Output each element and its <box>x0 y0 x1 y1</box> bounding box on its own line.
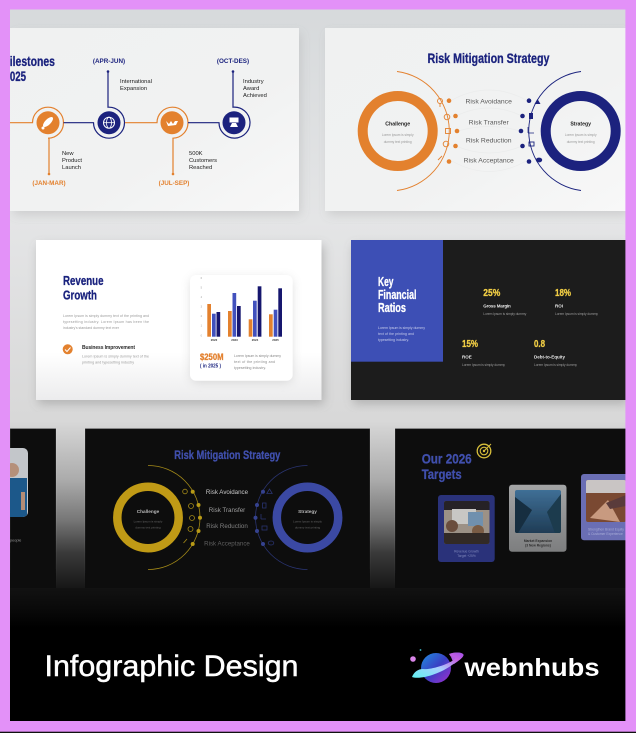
heading: key financial ratios: Financial <box>378 287 416 302</box>
strategy ring <box>546 96 616 166</box>
stat: roe: Lorem Ipsum is simply dummy <box>462 363 505 367</box>
stat: gross margin: 25% <box>483 288 500 299</box>
yellow icons <box>183 489 194 543</box>
navy icons <box>528 99 542 162</box>
footer title: Infographic Design <box>44 650 298 683</box>
timeline labels: Customers <box>189 158 217 164</box>
bar chart: 2023 <box>231 338 238 342</box>
card: market expansion <box>509 485 566 552</box>
icon: customers <box>160 111 184 134</box>
risk labels: Risk Avoidance <box>206 489 249 496</box>
stat: gross margin: Lorem Ipsum is simply dummy <box>483 312 527 316</box>
stat: roe: ROE <box>462 354 472 360</box>
chart card <box>191 278 292 382</box>
bottom edge line <box>0 732 636 733</box>
bar chart: 6 <box>201 277 203 280</box>
heading: risk mitigation strategy: Risk Mitigation Strategy <box>428 50 550 66</box>
stat: roi: 18% <box>555 288 571 299</box>
chart note: text of the printing and <box>234 360 275 364</box>
bar chart: 4 <box>201 296 203 299</box>
timeline labels: Achieved <box>243 93 267 99</box>
challenge text: Challenge <box>385 122 410 128</box>
strategy text: Strategy <box>298 509 317 514</box>
risk labels: Risk Transfer <box>469 120 509 126</box>
heading: revenue growth: Revenue <box>63 273 104 288</box>
timeline labels: New <box>62 151 74 157</box>
heading: key financial ratios: Ratios <box>378 300 406 315</box>
photo: person <box>10 448 28 517</box>
heading: Risk Mitigation Strategy <box>174 448 281 462</box>
business improvement: Lorem Ipsum is simply dummy text of the <box>82 354 149 358</box>
card: market expansion: (3 New Regions) <box>525 544 551 548</box>
stat: debt to equity: Lorem Ipsum is simply dummy <box>534 363 577 367</box>
strategy ring <box>277 487 338 548</box>
strategy text: dummy text printing <box>295 526 320 530</box>
icon: target <box>477 444 491 458</box>
business improvement: printing and typesetting industry <box>82 360 134 364</box>
paragraph: typesetting industry. <box>378 338 409 342</box>
business improvement: Business Improvement <box>82 345 135 351</box>
chart note: Lorem Ipsum is simply dummy <box>234 354 281 358</box>
card: revenue growth <box>438 495 495 562</box>
risk labels: Risk Acceptance <box>464 158 514 164</box>
paragraph <box>63 314 149 330</box>
paragraph <box>378 326 425 342</box>
risk labels: Risk Acceptance <box>204 540 250 548</box>
stat: roi <box>555 288 598 316</box>
bar chart: 3 <box>201 306 203 308</box>
timeline labels: Expansion <box>120 86 147 92</box>
strategy text <box>565 122 597 144</box>
icon: award <box>222 111 246 134</box>
heading: our 2026 targets: Our 2026 <box>422 450 472 466</box>
logo: webnhubs: webnhubs <box>463 654 600 682</box>
timeline labels <box>62 79 267 171</box>
bar chart: 0 <box>201 334 203 338</box>
stat: debt to equity <box>534 339 577 367</box>
timeline labels: Reached <box>189 165 212 171</box>
navy arc with dots <box>519 72 581 190</box>
strategy text <box>293 509 322 530</box>
strategy text: Lorem Ipsum is simply <box>565 133 597 137</box>
quarter labels: (APR-JUN) <box>93 58 125 65</box>
icon: rocket <box>36 111 60 134</box>
risk labels: Risk Avoidance <box>466 98 512 106</box>
faint connecting arcs <box>452 90 526 172</box>
stat: $250M <box>200 352 224 370</box>
challenge text: dummy text printing <box>135 526 161 530</box>
card: strengthen brand: Strengthen Brand Equity <box>588 528 624 532</box>
caption: people <box>10 538 21 542</box>
heading: revenue growth <box>63 273 104 302</box>
heading: milestones: Milestones <box>1 53 55 69</box>
card: revenue growth: Target +25% <box>457 554 476 558</box>
stat: $250M: ( in 2025 ) <box>200 364 221 370</box>
risk labels: Risk Reduction <box>466 138 512 144</box>
stat: roi: Lorem Ipsum is simply dummy <box>555 312 598 316</box>
paragraph: typesetting industry. Lorem Ipsum has been the <box>63 320 149 324</box>
photo: team at desk <box>444 501 490 544</box>
card: market expansion: Market Expansion <box>524 539 552 543</box>
chart note <box>234 354 281 370</box>
challenge text: Challenge <box>137 509 160 514</box>
orange arc with dots <box>397 72 459 190</box>
panel: key financial ratios slide <box>351 240 628 404</box>
paragraph: Lorem Ipsum is simply dummy <box>378 326 425 330</box>
bar chart: 2025 <box>272 338 279 342</box>
blue icons <box>261 489 274 545</box>
challenge text: Lorem Ipsum is simply <box>382 133 414 137</box>
panel: milestones timeline slide <box>0 28 301 215</box>
challenge text: Lorem Ipsum is simply <box>134 520 163 524</box>
business improvement <box>82 345 149 364</box>
risk labels: Risk Reduction <box>206 523 248 530</box>
quarter labels: (JUL-SEP) <box>159 180 189 187</box>
quarter labels: (JAN-MAR) <box>32 180 66 187</box>
footer band <box>10 588 626 721</box>
quarter labels <box>32 58 249 187</box>
bar chart: 2 <box>201 315 203 318</box>
bar chart: 5 <box>201 286 203 290</box>
bar chart <box>201 277 282 342</box>
challenge text: dummy text printing <box>384 140 412 144</box>
icon: check <box>63 344 73 354</box>
strategy text: Strategy <box>570 122 591 128</box>
paragraph: industry's standard dummy text ever <box>63 326 120 330</box>
panel: cropped dark slide <box>5 428 56 588</box>
icon: planet <box>410 649 463 683</box>
stat: roe <box>462 339 505 367</box>
timeline labels: Product <box>62 158 82 164</box>
risk labels <box>464 98 514 164</box>
heading: milestones <box>1 53 55 84</box>
challenge text <box>134 509 163 530</box>
stat: $250M: $250M <box>200 352 224 362</box>
bar chart: 1 <box>201 324 203 328</box>
paragraph: Lorem Ipsum is simply dummy text of the printing and <box>63 314 149 318</box>
stat: gross margin: Gross Margin <box>483 304 511 308</box>
blue block <box>351 240 443 362</box>
stat: roi: ROI <box>555 304 563 308</box>
logo: webnhubs <box>410 649 600 683</box>
timeline labels: Industry <box>243 79 264 85</box>
bar chart: 2024 <box>252 338 259 342</box>
panel: risk mitigation strategy light slide <box>325 28 628 215</box>
icon: globe <box>98 111 120 134</box>
heading: revenue growth: Growth <box>63 288 97 302</box>
photo: office towers <box>515 490 561 533</box>
card: strengthen brand: & Customer Experience <box>588 532 623 536</box>
stat: roe: 15% <box>462 339 478 350</box>
timeline labels: 500K <box>189 151 203 157</box>
challenge ring <box>117 487 179 548</box>
strategy text: Lorem Ipsum is simply <box>293 520 322 524</box>
photo: hands together <box>586 480 626 522</box>
card: strengthen brand <box>581 474 626 540</box>
blue arc with dots <box>254 466 308 570</box>
panel: risk mitigation dark slide <box>85 428 370 588</box>
heading: key financial ratios <box>378 274 416 315</box>
quarter labels: (OCT-DES) <box>217 58 249 65</box>
stat: debt to equity: Debt-to-Equity <box>534 354 565 360</box>
paragraph: text of the printing and <box>378 332 414 336</box>
timeline labels: Launch <box>62 165 81 171</box>
orange icons <box>438 98 450 160</box>
bar chart: 2022 <box>211 338 218 342</box>
risk labels <box>204 489 250 548</box>
challenge text <box>382 122 414 144</box>
strategy text: dummy text printing <box>567 140 595 144</box>
stat: gross margin <box>483 288 527 316</box>
heading: our 2026 targets: Targets <box>422 466 462 482</box>
risk labels: Risk Transfer <box>209 507 245 514</box>
chart note: typesetting industry. <box>234 366 266 370</box>
yellow arc with dots <box>148 466 202 570</box>
timeline connectors <box>0 72 250 174</box>
card: revenue growth: Revenue Growth <box>454 550 479 554</box>
heading: milestones: 2025 <box>4 68 26 84</box>
stat: debt to equity: 0.8 <box>534 339 545 350</box>
timeline labels: Award <box>243 86 259 92</box>
challenge ring <box>363 96 433 166</box>
timeline labels: International <box>120 79 152 85</box>
heading: our 2026 targets <box>422 450 472 482</box>
panel: revenue growth slide <box>36 240 324 404</box>
panel: our 2026 targets slide <box>395 428 631 588</box>
heading: key financial ratios: Key <box>378 274 394 289</box>
